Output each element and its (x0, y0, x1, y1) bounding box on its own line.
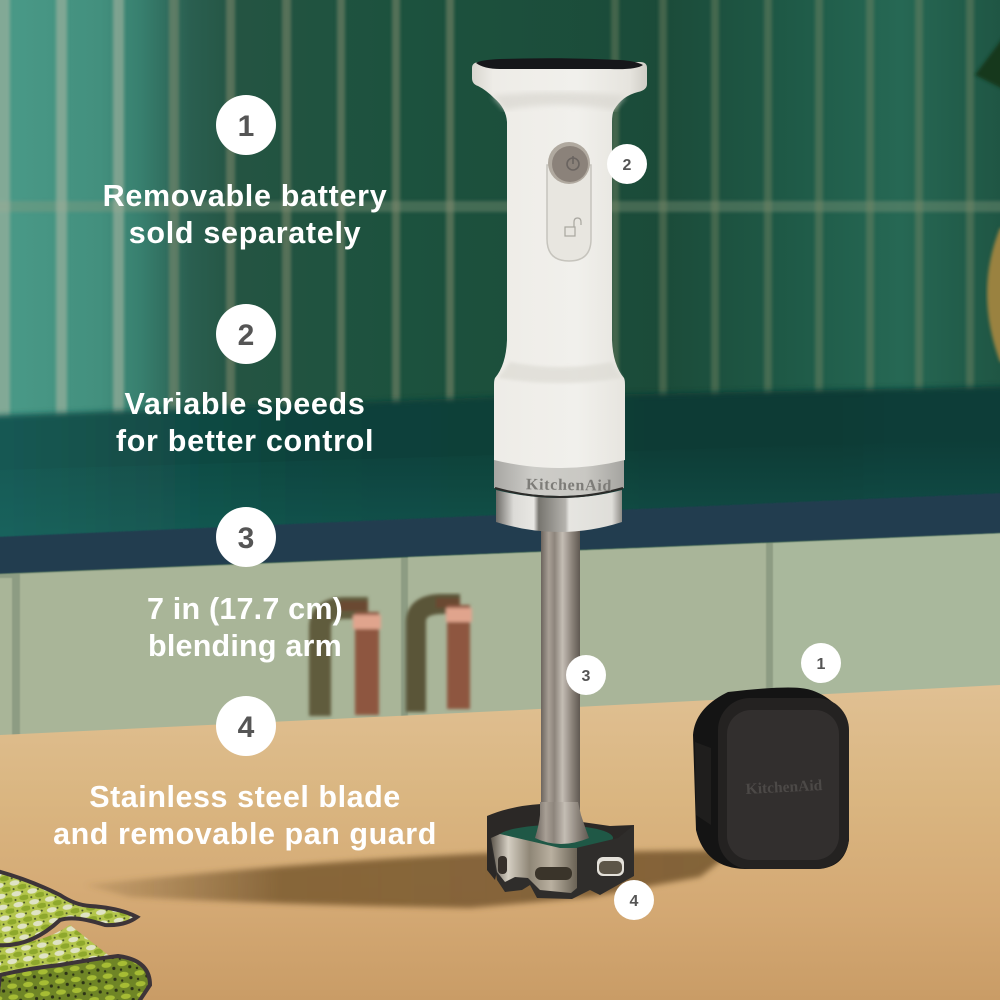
blending arm (541, 525, 580, 810)
callout marker 1: battery (801, 643, 841, 683)
battery (693, 688, 849, 869)
wooden table (0, 685, 1000, 1000)
callout marker 3: blending arm: 3 (582, 668, 591, 685)
callout marker 1: battery: 1 (817, 656, 826, 673)
feature 1 number badge (216, 95, 276, 155)
feature 4 number badge: 4 (238, 711, 255, 744)
shadows on table (85, 850, 735, 908)
feature 3 number badge (216, 507, 276, 567)
background: dark reflective counter (0, 386, 1000, 546)
folded cloth (0, 871, 150, 1000)
callout marker 3: blending arm (566, 655, 606, 695)
feature 1 number badge: 1 (238, 110, 254, 143)
feature 1 caption: Removable battery (103, 179, 387, 213)
callout marker 4: blade: 4 (630, 893, 639, 910)
cabinet handles (320, 603, 472, 716)
feature 3 caption: blending arm (148, 629, 342, 663)
switch pad (547, 142, 591, 261)
feature 4 caption: Stainless steel blade (89, 780, 401, 814)
callout marker 2: speed button: 2 (623, 157, 632, 174)
feature 4 caption: and removable pan guard (53, 817, 437, 851)
handle body (472, 62, 647, 468)
feature 2 caption: for better control (116, 424, 374, 458)
feature 3 number badge: 3 (238, 522, 254, 555)
callout marker 4: blade (614, 880, 654, 920)
feature 2 number badge: 2 (238, 319, 254, 352)
callout marker 2: speed button (607, 144, 647, 184)
feature 1 caption: sold separately (129, 216, 361, 250)
background: counter edge (0, 493, 1000, 574)
feature 3 caption: 7 in (17.7 cm) (147, 592, 343, 626)
feature 2 caption: Variable speeds (124, 387, 366, 421)
feature 4 number badge (216, 696, 276, 756)
battery brand label: KitchenAid (745, 777, 823, 798)
pan guard and blade (487, 802, 634, 899)
blender (472, 58, 647, 899)
motor collar (494, 458, 624, 496)
background: green tiled wall (0, 0, 1000, 425)
battery slot top (476, 58, 643, 69)
brand label: KitchenAid (526, 476, 612, 495)
background: sage cabinets (0, 533, 1000, 745)
feature 2 number badge (216, 304, 276, 364)
